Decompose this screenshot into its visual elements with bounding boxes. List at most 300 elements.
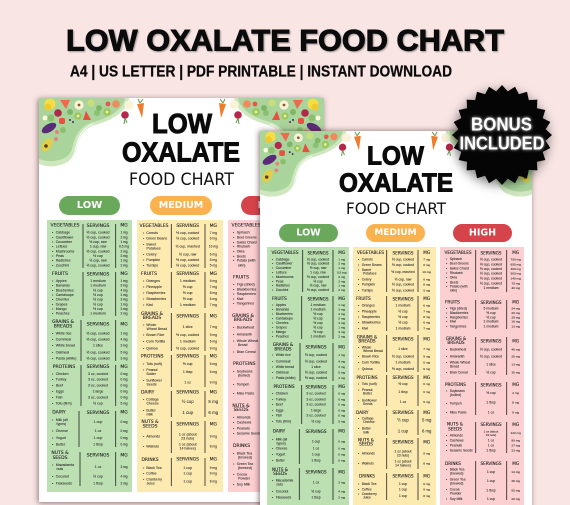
back panel: high: • Swiss Chard [233, 240, 257, 244]
back panel: medium: Potatoes [146, 246, 161, 250]
back panel: high: • Tempeh [233, 383, 249, 387]
front panel: high: ½ cup, cooked [480, 262, 502, 266]
front panel: low: SERVINGS [305, 384, 327, 390]
front panel: high: MG [512, 461, 519, 466]
back panel: low: • Blueberries [52, 288, 74, 292]
front panel: high: • Kiwi [446, 320, 456, 324]
back pill low [59, 196, 120, 215]
front panel: medium: 1 cup [398, 428, 409, 434]
back panel: low: 1 medium [90, 279, 106, 283]
front panel: high: 500 mg [511, 272, 521, 276]
front panel: low: MG [338, 470, 345, 474]
front panel: high: GRAINS & [446, 336, 467, 341]
front panel: low: PROTEINS [274, 384, 295, 389]
front panel: medium: 6 mg [423, 303, 430, 307]
front panel: medium: • Raspberries [358, 315, 380, 319]
front panel: low: ½ cup, raw [310, 266, 327, 270]
front panel: low: SERVINGS [305, 344, 327, 350]
back panel: high: Powder [238, 476, 251, 480]
back panel: low: • White rice [52, 332, 72, 336]
back panel: medium: Juice [146, 481, 155, 485]
back panel: low: ½ cup [93, 307, 103, 311]
front panel: high: skin) [450, 288, 457, 292]
front panel: medium: SERVINGS [392, 474, 414, 478]
back panel: low: ½ cup, raw [89, 240, 107, 244]
back panel: high: • Peanuts [233, 426, 250, 430]
back panel: low: VEGETABLES [50, 222, 80, 228]
front panel: high: 65 mg [511, 488, 520, 492]
front panel: medium: ½ cup, cooked [392, 283, 414, 287]
front panel: low: ½ cup [311, 419, 321, 423]
front panel: low: • Zucchini [272, 288, 289, 292]
front panel: medium: ½ cup [398, 315, 408, 319]
back panel: high: • Beets [233, 254, 246, 258]
front panel: medium [353, 247, 436, 505]
back panel: low [47, 220, 132, 492]
back panel: medium: BREADS [143, 315, 161, 321]
back panel: high: GRAINS & [232, 313, 254, 319]
back panel: low: • Zucchini [52, 264, 69, 268]
back panel: medium: 8 mg [210, 479, 217, 483]
back panel: medium: ½ cup, cooked [176, 258, 199, 262]
title: LOW OXALATE FOOD CHART [66, 24, 504, 58]
front panel: low: 3 mg [338, 321, 345, 325]
back panel: low: 0 mg [120, 395, 128, 399]
back panel: low: • Peas [52, 254, 64, 258]
front panel: low: 3 mg [338, 376, 345, 380]
back panel: medium: • Carrots [143, 231, 158, 235]
front panel: low: SERVINGS [307, 250, 329, 256]
front panel: medium: ½ cup, cooked [392, 263, 414, 267]
back panel: low: • Chicken [52, 372, 69, 376]
front panel: medium: • Tofu (soft) [358, 382, 377, 386]
back panel: low: • White bread [52, 344, 75, 348]
back panel: low: 5 mg [120, 350, 128, 354]
back panel: medium: • Sweet [143, 242, 156, 246]
front page heading: LOW [367, 140, 424, 170]
back panel: low: 1 medium [90, 312, 106, 316]
back panel: medium: • Quinoa [143, 347, 158, 351]
front panel: low: • Blueberries [272, 312, 293, 316]
front panel: low: ½ cup [311, 489, 321, 493]
front panel: medium: ½ cup [398, 309, 408, 313]
front panel: high: 23 nuts) [486, 433, 496, 437]
front panel: high: MG [512, 250, 519, 255]
front panel: low: 5 mg [338, 371, 345, 375]
front panel: high: SERVINGS [480, 382, 502, 388]
front panel: medium: • Butter [358, 427, 372, 431]
front panel: low: • Cheese [272, 447, 287, 451]
front panel: high: 23 mg [511, 449, 520, 453]
back panel: low: MG [120, 452, 128, 458]
front panel: high: 13 mg [511, 324, 520, 328]
back panel: low: • Cherries [52, 298, 69, 302]
front panel: low: • Cornmeal [272, 360, 291, 364]
back panel: high: NUTS & [232, 403, 250, 409]
front panel: high: ½ cup [486, 391, 496, 395]
front panel: medium: BREADS [358, 338, 376, 344]
back panel: medium: 9 mg [210, 333, 217, 337]
back panel: high [228, 220, 314, 492]
front panel: medium: • Green Beans [358, 263, 382, 267]
front panel: medium: ½ cup, cooked [392, 355, 414, 359]
badge: bonus included: INCLUDED [460, 134, 544, 154]
front panel: medium: 9 mg [423, 367, 430, 371]
front panel: medium: 7 mg [423, 309, 430, 313]
back panel: low: 1 slice [93, 344, 103, 348]
front panel: low: 1 mg [338, 257, 345, 261]
front pill low [279, 224, 338, 242]
back panel: medium: MG [210, 223, 217, 229]
front panel: medium: Juice [363, 496, 371, 500]
front panel: high: 1 oz [488, 444, 495, 448]
front panel: high: 1 medium [484, 320, 499, 324]
front panel: high: (brewed) [450, 481, 463, 485]
front panel: high: ½ cup, cooked [480, 281, 502, 285]
back panel: high: • Rhubarb [233, 245, 250, 249]
front panel: low: 1 medium [311, 307, 326, 311]
back panel: medium: Wheat Bread [146, 327, 167, 331]
front panel: high: 8 mg [512, 400, 519, 404]
back panel: medium: DAIRY [141, 390, 155, 396]
back panel: low: NUTS & [51, 450, 69, 456]
back panel: medium: 10 mg [209, 244, 218, 248]
front panel: medium: • Corn Tortilla [358, 360, 380, 364]
front panel: high: • Beets [446, 280, 459, 284]
back panel: low: • Yogurt [52, 436, 66, 440]
back panel: medium: ½ cup [183, 362, 193, 366]
front panel: medium: SERVINGS [392, 375, 414, 380]
back panel: high: • Buckwheat [233, 325, 254, 329]
front panel: high: 20 mg [511, 354, 520, 358]
front panel: medium: • Almonds [358, 452, 375, 456]
front panel: low: 1 medium [311, 303, 326, 307]
front panel: high: 30 mg [511, 371, 520, 375]
back panel: low: ½ cup, cooked [86, 235, 110, 239]
front panel: low: MG [338, 250, 345, 255]
front panel: high [440, 247, 524, 505]
front panel: high: 1 oz [488, 410, 495, 414]
back panel: high: • Figs (dried) [233, 283, 255, 287]
front panel: low: • White rice [272, 353, 291, 357]
back panel: medium: Cheese [146, 402, 159, 406]
back panel: low: 3 mg [120, 356, 128, 360]
front panel: low: 2 mg [338, 317, 345, 321]
front panel: medium: FRUITS [356, 296, 371, 301]
front panel: medium: • Walnuts [358, 461, 374, 465]
back panel: high: • Sesame Seeds [233, 432, 261, 436]
back page corner art right [219, 98, 324, 166]
front panel: low: 0 mg [338, 440, 345, 444]
front panel: low: 0.5 mg [337, 271, 347, 275]
front panel: high: 80 mg [511, 438, 520, 442]
front panel: low: 3 mg [338, 330, 345, 334]
back panel: low: SERVINGS [87, 452, 109, 458]
back panel: low: • Bananas [52, 284, 70, 288]
back panel: low: BREADS [54, 324, 72, 330]
back panel: low: 0 mg [120, 372, 128, 376]
front panel: medium: 6 mg [423, 263, 430, 267]
back panel: low: • Flaxseeds [52, 481, 72, 485]
back panel: low: 1 cup [94, 420, 102, 424]
front panel: medium: 1 cup [399, 482, 407, 486]
front panel: low: 0 mg [338, 447, 345, 451]
front panel: high: • Bran Cereal [446, 371, 468, 375]
front panel: medium: • Pumpkin [358, 283, 375, 287]
back panel: high: • Tangerines [233, 302, 254, 306]
back panel: low: • Cheese [52, 429, 68, 433]
front panel: high: SEEDS [448, 426, 462, 432]
front panel: low: 1 cup, raw [310, 271, 326, 275]
back panel: low: 3 mg [120, 254, 128, 258]
back panel: low: • Grapes [52, 302, 68, 306]
front panel: low: BREADS [274, 346, 292, 352]
front pill medium [366, 224, 425, 242]
back panel: medium: DRINKS [141, 457, 159, 463]
front panel: medium: 1 medium [396, 360, 411, 364]
front panel: high: 1 oz (about [484, 430, 498, 434]
front panel: medium: ½ cup, cooked [392, 288, 414, 292]
back panel: medium: • Walnuts [143, 445, 159, 449]
back panel: medium: ½ cup, cooked [176, 231, 199, 235]
back panel: low: SERVINGS [87, 322, 109, 328]
front panel: medium: ½ cup, cooked [392, 367, 414, 371]
back panel: high: BREADS [234, 317, 252, 323]
back panel: medium: • Almonds [143, 435, 160, 439]
front panel: medium: 1 oz [400, 400, 407, 404]
front panel: medium: 1 medium [396, 326, 411, 330]
back panel: high: • Okra [233, 250, 244, 254]
front panel: low: 1 mg [338, 303, 345, 307]
back panel: medium: 7 mg [210, 231, 217, 235]
back panel: medium: 9 mg [210, 466, 217, 470]
front page corner art left [260, 131, 361, 197]
back panel: medium: milk [146, 412, 153, 416]
front panel: low: • Oatmeal [272, 371, 289, 375]
front panel: high: SERVINGS [480, 250, 502, 256]
front panel: high: • Tangerines [446, 324, 467, 328]
back panel: low: 1 mg [120, 332, 128, 336]
front panel: high: 40 mg [511, 286, 520, 290]
back panel: low: 1 cup, raw [90, 245, 107, 249]
back pill high [241, 196, 303, 215]
front panel: medium: MG [423, 440, 430, 444]
front panel: medium: ½ cup, raw [395, 277, 412, 281]
front panel: medium: 6 mg [423, 360, 430, 364]
front panel: high: 13 mg [511, 362, 520, 366]
front panel: medium: • Cottage [358, 416, 374, 420]
front panel: high: ½ cup, cooked [480, 277, 502, 281]
back panel: medium: • Butter [143, 408, 157, 412]
front panel: low: ½ cup [313, 326, 323, 330]
front panel: low: 0 mg [338, 392, 345, 396]
front panel: medium: PROTEINS [357, 375, 378, 380]
front panel: medium: 8 mg [423, 283, 430, 287]
back panel: low: DAIRY [52, 410, 66, 416]
front panel: high: 1 cup [487, 479, 495, 483]
front panel: medium: Potatoes [363, 272, 377, 276]
front panel: low: 3 mg [338, 307, 345, 311]
back panel: high: • Soybeans [233, 369, 253, 373]
front panel: medium: • Celery [358, 277, 372, 281]
back panel: low: 1 tbsp [93, 442, 103, 446]
back panel: low: 0.5 mg [119, 245, 129, 249]
front panel: low: 2 mg [338, 262, 345, 266]
front panel: low: SEEDS [273, 471, 287, 476]
back panel: low: 0 mg [120, 378, 128, 382]
back panel: low: MG [120, 222, 128, 228]
front panel: high: • Almonds [446, 433, 463, 437]
front panel: high: 1 oz [488, 438, 495, 442]
back panel: medium: ½ cup [182, 399, 194, 404]
back panel: medium: 8 mg [210, 445, 217, 449]
back panel: low: • Cantaloupe [52, 293, 74, 297]
front panel: high: 1 tbsp [486, 488, 496, 492]
subtitle: A4 | US LETTER | PDF PRINTABLE | INSTANT DOWNLOAD [70, 64, 452, 80]
back panel: high: • Amaranth [233, 332, 252, 336]
front panel: low: • Grapes [272, 326, 287, 330]
front panel: medium: • Pineapple [358, 309, 377, 313]
back panel: low: 5 mg [120, 401, 128, 405]
back panel: medium: • Sunflower [143, 378, 163, 382]
back panel: high: • Cashews [233, 421, 252, 425]
front pill high [453, 224, 512, 242]
front panel: medium: 9 mg [423, 355, 430, 359]
back panel: low: ½ cup, cooked [86, 231, 110, 235]
back panel: high: • Cocoa [233, 472, 247, 476]
front page [260, 131, 532, 505]
back panel: medium: SERVINGS [176, 314, 199, 320]
back panel: high: • Spinach [233, 231, 250, 235]
front panel: high: • Cocoa [446, 487, 460, 491]
back panel: medium: Butter [146, 372, 157, 376]
back panel: low: ½ cup, raw [89, 259, 107, 263]
back pill medium: MEDIUM [159, 200, 203, 211]
back panel: medium: • Strawberries [143, 297, 166, 301]
back panel: low: • Radishes [52, 259, 71, 263]
front panel: high: ½ cup, cooked [480, 354, 502, 358]
back panel: high: • Bran Cereal [233, 350, 256, 354]
back panel: low: ½ cup [93, 298, 103, 302]
back panel: medium: • Raspberries [143, 291, 166, 295]
front panel: medium: 6 mg [423, 321, 430, 325]
front panel: low: ½ cup, cooked [307, 257, 329, 261]
front panel: low: • White bread [272, 365, 294, 369]
front panel: medium: • Peanut [358, 388, 372, 392]
back panel: low: 2 mg [120, 312, 128, 316]
back panel: medium: 1 cup [183, 466, 192, 470]
back panel: medium: MG [210, 271, 217, 277]
front panel: low: • Fish [272, 414, 282, 418]
front panel: low: • Cabbage [272, 257, 290, 261]
front panel: high: ½ cup, cooked [480, 272, 502, 276]
back panel: medium: MG [210, 422, 217, 428]
front panel: low: • Cucumber [272, 266, 292, 270]
front panel: medium: 14 halves) [395, 463, 411, 467]
back panel: low: 0 mg [120, 436, 128, 440]
front panel: high: • Miso Paste [446, 410, 467, 414]
front panel: medium: 5 mg [422, 418, 432, 422]
back panel: medium: • Corn Tortilla [143, 339, 165, 343]
front panel: low: 2 mg [338, 335, 345, 339]
front panel: high: • Potato (with [446, 285, 468, 289]
back panel: medium: ½ cup [183, 291, 193, 295]
back panel: low: 1 medium [90, 284, 106, 288]
back panel: medium: 1 cup [182, 410, 194, 415]
back panel: high: • Raspberries [233, 292, 256, 296]
back panel: medium: • Brown Rice [143, 333, 164, 337]
back panel: high: • Beet Greens [233, 235, 257, 239]
front panel: medium: 6 mg [423, 382, 430, 386]
back panel: medium: 9 mg [210, 472, 217, 476]
front panel: medium: Seeds [363, 402, 373, 406]
back panel: low: • Cornmeal [52, 338, 71, 342]
front panel: medium: DAIRY [356, 410, 369, 415]
front panel: low: • Flaxseeds [272, 496, 291, 500]
front panel: medium: 8 mg [423, 494, 430, 498]
back panel: medium: 1 medium [180, 303, 196, 307]
back panel: medium: 6 mg [210, 339, 217, 343]
back panel: medium: 5 mg [210, 264, 217, 268]
back panel: high: Bread [238, 343, 247, 347]
front panel: low: • Apples [272, 303, 286, 307]
front panel: medium: 8 mg [423, 315, 430, 319]
back panel: medium: ½ cup [183, 297, 193, 301]
front panel: low: 1 oz [313, 480, 320, 484]
back panel: low: 2 mg [120, 293, 128, 297]
back panel: medium: ½ cup, raw [179, 252, 197, 256]
front panel: low: 1 cup [312, 440, 320, 444]
front panel: medium: • Strawberries [358, 321, 381, 325]
badge: bonus included [452, 85, 552, 185]
front panel: low: SERVINGS [305, 429, 327, 434]
back panel: low: types) [56, 422, 66, 426]
back page heading [122, 108, 240, 190]
front panel: low: • Bananas [272, 307, 289, 311]
back panel: low: • Apples [52, 279, 67, 283]
front panel: medium: 10 mg [422, 270, 431, 274]
back panel: low: ½ cup [93, 288, 103, 292]
front panel: medium: 6 mg [422, 428, 432, 434]
back panel: high: • Blackberries [233, 287, 256, 291]
back panel: low: 2 mg [120, 264, 128, 268]
back panel: medium: SERVINGS [176, 390, 199, 396]
front page heading [339, 140, 453, 218]
front panel: high: ½ cup [486, 371, 496, 375]
back panel: low: 1 oz [95, 429, 102, 433]
back panel: low: • Eggs [52, 390, 64, 394]
front panel: low: 1 mg [338, 326, 345, 330]
back panel: low: MG [120, 410, 128, 416]
front panel: high: 30 mg [511, 315, 520, 319]
front panel: low: 1 mg [338, 266, 345, 270]
back panel: low: 3 oz, cooked [88, 384, 108, 388]
front panel: high: BREADS [447, 340, 465, 345]
front panel: high: ½ cup, cooked [480, 258, 502, 262]
front panel: high: • Green Tea [446, 477, 466, 481]
front panel: low: • Milk (all [272, 438, 287, 442]
back panel: medium: • Oranges [143, 279, 160, 283]
back panel: high: (boiled) [238, 373, 250, 377]
front panel: high: 1 cup [487, 470, 495, 474]
back panel: medium: • Green Beans [143, 237, 167, 241]
front panel: high: Bread [450, 364, 459, 368]
back panel: low: 1 oz [95, 465, 102, 469]
front panel: medium: 7 mg [423, 257, 430, 261]
back panel: medium: • Pumpkin [143, 258, 160, 262]
front panel: low: 3 oz, cooked [306, 397, 326, 401]
back panel: medium: • Black Tea [143, 466, 162, 470]
